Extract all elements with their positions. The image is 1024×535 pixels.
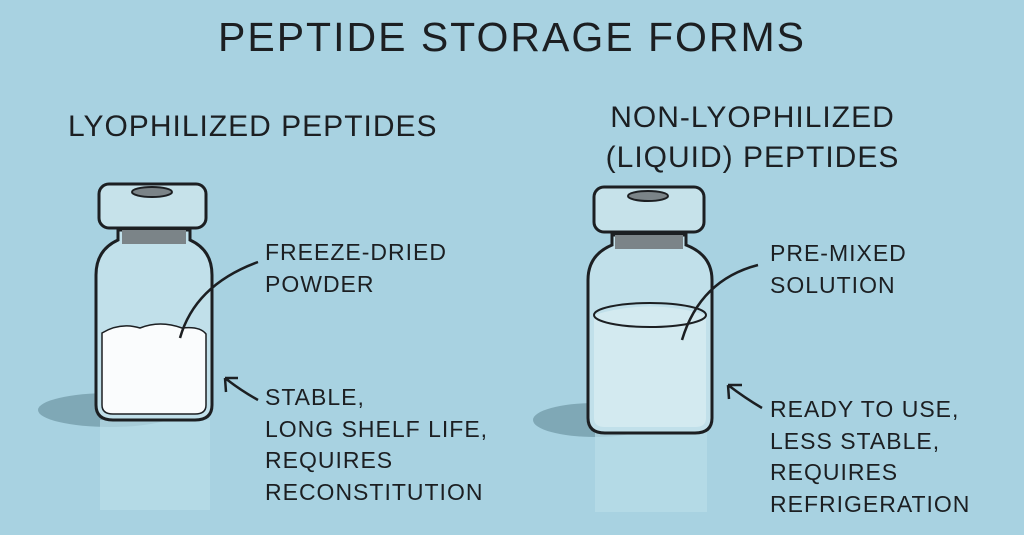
- label: ready to use: [770, 396, 970, 516]
- label: stable: RECONSTITUTION: [265, 478, 483, 504]
- label: ready to use: READY TO USE,: [770, 396, 959, 422]
- label: freeze-dried powder: FREEZE-DRIED: [265, 239, 447, 265]
- vial: lyophilized: [38, 184, 258, 510]
- label: stable: [265, 384, 488, 504]
- label: stable: STABLE,: [265, 384, 365, 410]
- heading: lyophilized: LYOPHILIZED PEPTIDES: [68, 110, 438, 143]
- title: PEPTIDE STORAGE FORMS: [218, 14, 806, 60]
- label: freeze-dried powder: POWDER: [265, 270, 374, 296]
- label: freeze-dried powder: [265, 239, 447, 296]
- heading: non-lyophilized: [606, 101, 899, 174]
- label: stable: REQUIRES: [265, 447, 393, 473]
- label: ready to use: REFRIGERATION: [770, 490, 970, 516]
- label: stable: LONG SHELF LIFE,: [265, 416, 488, 442]
- label: pre-mixed: PRE-MIXED: [770, 240, 907, 266]
- vial: liquid: [533, 187, 762, 512]
- label: ready to use: LESS STABLE,: [770, 428, 940, 454]
- label: ready to use: REQUIRES: [770, 459, 898, 485]
- label: pre-mixed: [770, 240, 907, 298]
- heading: non-lyophilized: NON-LYOPHILIZED: [610, 101, 895, 134]
- heading: non-lyophilized: (LIQUID) PEPTIDES: [606, 141, 899, 174]
- label: pre-mixed: SOLUTION: [770, 272, 896, 298]
